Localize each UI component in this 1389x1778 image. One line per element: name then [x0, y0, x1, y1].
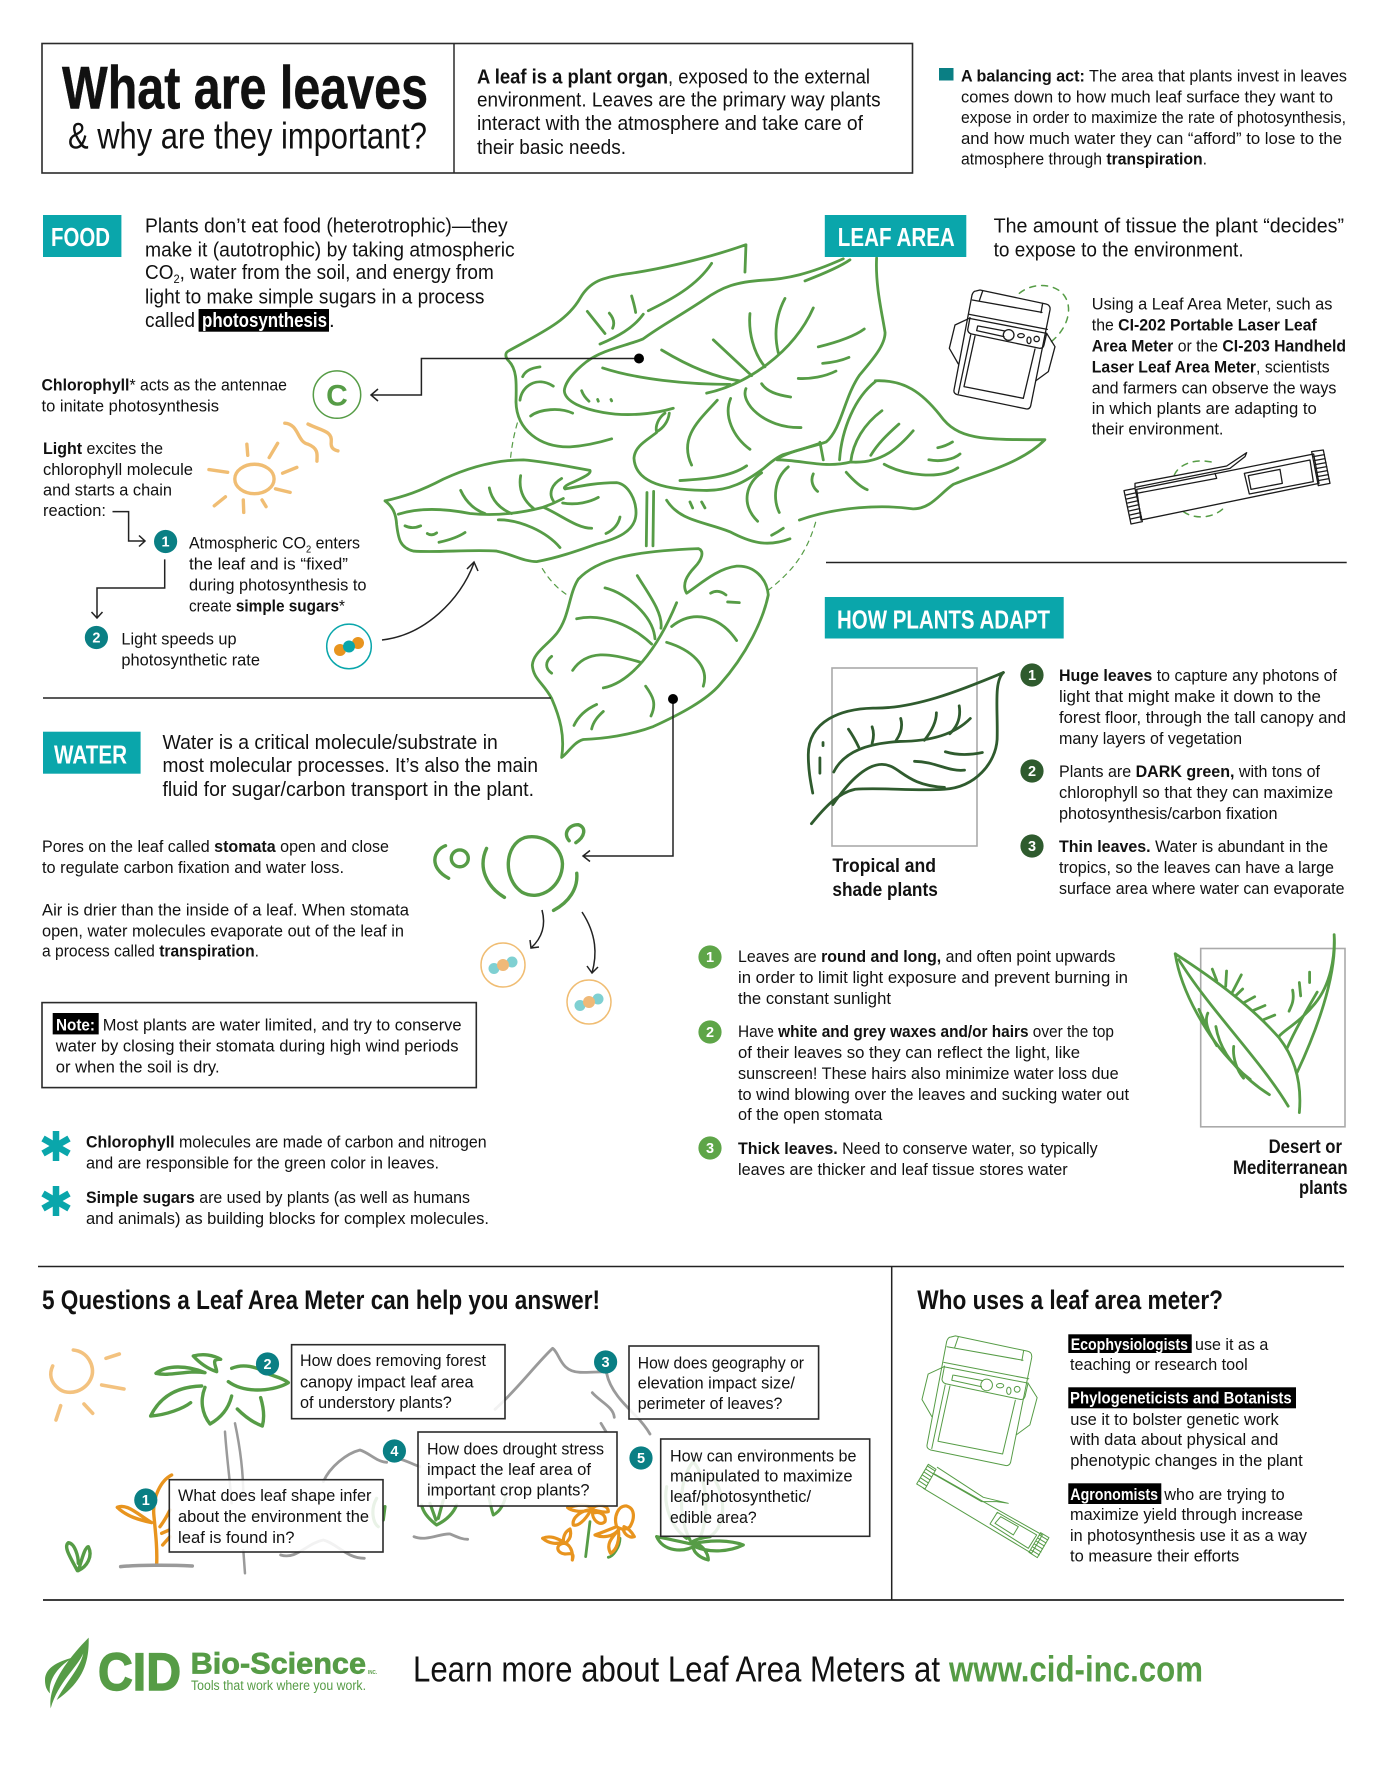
- leaf area meter text: and farmers can observe the ways: [1092, 378, 1336, 397]
- phylogeneticists text: with data about physical and: [1069, 1430, 1278, 1449]
- question 3: 3: [602, 1355, 610, 1371]
- note box: Most plants are water limited, and try to conserve: [103, 1016, 462, 1034]
- question 1: [134, 1480, 383, 1552]
- desert point 2: sunscreen! These hairs also minimize water loss due: [738, 1064, 1119, 1083]
- water paragraph: fluid for sugar/carbon transport in the plant.: [162, 778, 534, 801]
- question 2: of understory plants?: [300, 1393, 452, 1412]
- tropical leaf illustration: [808, 668, 1003, 846]
- transpiration text: open, water molecules evaporate out of the leaf in: [42, 921, 404, 940]
- scene: small sprout: [67, 1543, 90, 1571]
- question 2: How does removing forest: [300, 1351, 486, 1370]
- tropical point 1: light that might make it down to the: [1059, 687, 1321, 706]
- chlorophyll footnote: Chlorophyll molecules are made of carbon and nitrogen: [86, 1133, 487, 1152]
- question 4: How does drought stress: [427, 1439, 604, 1458]
- agronomists text: [1068, 1483, 1307, 1566]
- balancing act note: comes down to how much leaf surface they want to: [961, 88, 1333, 107]
- light text: and starts a chain: [43, 480, 172, 500]
- desert label: [1233, 1137, 1348, 1199]
- landscape scene: [51, 1348, 743, 1573]
- stomata text: Pores on the leaf called stomata open and close: [42, 837, 389, 856]
- scene: orange seedling: [117, 1475, 172, 1565]
- heading: 5 questions: 5 Questions a Leaf Area Meter can help you answer!: [42, 1285, 600, 1315]
- chlorophyll text: Chlorophyll* acts as the antennae: [42, 376, 287, 395]
- question 4: 4: [390, 1444, 398, 1460]
- question 1: What does leaf shape infer: [178, 1486, 372, 1505]
- question 5: manipulated to maximize: [670, 1466, 852, 1485]
- icon: logo leaf: [45, 1638, 89, 1708]
- scene: palm tree: [151, 1355, 288, 1573]
- question 1: 1: [142, 1493, 150, 1509]
- note box: water by closing their stomata during high wind periods: [55, 1037, 459, 1056]
- desert point 2: [698, 1020, 1129, 1124]
- transpiration text: [42, 900, 410, 960]
- icon: green handheld meter: [917, 1464, 1049, 1558]
- leaf area meter text: in which plants are adapting to: [1092, 399, 1317, 418]
- transpiration text: Air is drier than the inside of a leaf. When stomata: [42, 900, 410, 919]
- step 1 number: 1: [162, 535, 170, 551]
- agronomists text: Agronomists: [1070, 1485, 1158, 1504]
- step 1 number: [154, 530, 177, 553]
- icon: water molecule 2: [567, 980, 611, 1024]
- question 5: 5: [637, 1451, 645, 1467]
- tropical point 2: 2: [1028, 764, 1036, 780]
- scene: crop plant: [488, 1493, 506, 1515]
- phylogeneticists text: phenotypic changes in the plant: [1070, 1451, 1303, 1470]
- question 3: elevation impact size/: [638, 1373, 795, 1392]
- logo: CID Bio-Science: CID: [98, 1643, 181, 1702]
- food paragraph: light to make simple sugars in a process: [145, 286, 484, 309]
- arrow: reaction to step 1: [112, 512, 145, 546]
- transpiration text: a process called transpiration.: [42, 941, 259, 960]
- logo: CID Bio-Science: INC.: [368, 1670, 378, 1676]
- tropical label: [832, 855, 938, 901]
- call to action: Learn more about Leaf Area Meters at: [413, 1649, 940, 1690]
- icon: teal square: [939, 68, 954, 80]
- arrow: leaf to chlorophyll: [371, 354, 644, 401]
- icon: sugar molecule: [327, 624, 371, 669]
- phylogeneticists text: use it to bolster genetic work: [1070, 1410, 1279, 1429]
- scene: ground: [121, 1565, 192, 1567]
- ecophysiologists text: Ecophysiologists: [1071, 1335, 1188, 1354]
- chlorophyll footnote: [86, 1133, 487, 1173]
- ecophysiologists text: teaching or research tool: [1070, 1355, 1248, 1374]
- intro text: A leaf is a plant organ, exposed to the external: [477, 66, 870, 88]
- food paragraph: .: [329, 309, 335, 332]
- LEAF AREA section: [825, 215, 1346, 524]
- tropical point 2: chlorophyll so that they can maximize: [1059, 783, 1333, 802]
- icon: portable leaf area meter: [949, 286, 1069, 409]
- scene: sun: [51, 1350, 124, 1420]
- tropical point 3: tropics, so the leaves can have a large: [1059, 858, 1334, 877]
- tropical point 3: Thin leaves. Water is abundant in the: [1059, 837, 1328, 856]
- HOW PLANTS ADAPT badge: HOW PLANTS ADAPT: [837, 605, 1050, 635]
- desert point 3: Thick leaves. Need to conserve water, so typically: [738, 1139, 1098, 1158]
- question 3: perimeter of leaves?: [638, 1394, 782, 1413]
- leaf stems: [646, 491, 654, 546]
- question 1: leaf is found in?: [178, 1528, 294, 1547]
- question 2: canopy impact leaf area: [300, 1372, 474, 1391]
- step 2 text: Light speeds up: [121, 630, 237, 649]
- light text: reaction:: [43, 501, 106, 520]
- desert point 3: leaves are thicker and leaf tissue stores water: [738, 1160, 1068, 1179]
- leaf area meter text: Area Meter or the CI-203 Handheld: [1092, 336, 1346, 355]
- balancing act note: and how much water they can “afford” to lose to the: [961, 129, 1342, 148]
- ecophysiologists text: use it as a: [1195, 1335, 1269, 1354]
- icon: chlorophyll circle: C: [326, 380, 348, 412]
- tropical label: Tropical and: [832, 855, 936, 877]
- leaf: top left leaf: [506, 245, 746, 447]
- agronomists text: in photosynthesis use it as a way: [1070, 1526, 1307, 1545]
- FOOD badge: FOOD: [51, 222, 110, 252]
- chlorophyll footnote: and are responsible for the green color in leaves.: [86, 1154, 439, 1173]
- tropical point 3: [1020, 834, 1344, 898]
- desert point 3: [698, 1136, 1098, 1179]
- leaf area meter text: their environment.: [1092, 419, 1224, 438]
- food paragraph: make it (autotrophic) by taking atmospheric: [145, 239, 515, 262]
- FOOD section: [42, 215, 644, 670]
- question 5: leaf/photosynthetic/: [670, 1487, 811, 1506]
- water paragraph: [162, 731, 538, 801]
- leaf area meter text: Using a Leaf Area Meter, such as: [1092, 294, 1332, 313]
- arrow: sugar to leaf: [382, 562, 478, 640]
- agronomists text: maximize yield through increase: [1070, 1505, 1303, 1524]
- title panel: [42, 44, 912, 173]
- tropical point 1: many layers of vegetation: [1059, 729, 1242, 748]
- light text: chlorophyll molecule: [43, 460, 193, 479]
- heading: who uses: Who uses a leaf area meter?: [917, 1285, 1223, 1315]
- logo: CID Bio-Science: Bio-Science: [191, 1647, 366, 1680]
- divider: [826, 562, 1347, 564]
- arrow: leaf to stomata: [583, 694, 678, 862]
- agronomists text: who are trying to: [1163, 1485, 1285, 1504]
- scene: small plants: [373, 1498, 457, 1527]
- leaf area intro: [994, 215, 1344, 262]
- bottom panel rules: [38, 1266, 1344, 1600]
- question 5: edible area?: [670, 1508, 757, 1527]
- icon: asterisk: [43, 1186, 69, 1216]
- desert point 2: of their leaves so they can reflect the light, like: [738, 1043, 1080, 1062]
- icon: water molecule 1: [481, 943, 525, 987]
- leaf area intro: The amount of tissue the plant “decides”: [994, 215, 1344, 238]
- agronomists text: to measure their efforts: [1070, 1547, 1239, 1566]
- who uses panel: [917, 1285, 1307, 1566]
- simple sugars footnote: and animals) as building blocks for complex molecules.: [86, 1209, 489, 1228]
- title: [62, 54, 428, 156]
- divider: [43, 697, 551, 699]
- intro text: environment. Leaves are the primary way plants: [477, 88, 881, 112]
- leaf: bottom leaf: [532, 549, 768, 757]
- light text: [43, 439, 193, 520]
- icon: chlorophyll circle: [313, 371, 361, 418]
- footer: [45, 1638, 1203, 1708]
- stomata text: [42, 837, 389, 877]
- ecophysiologists text: [1068, 1334, 1269, 1374]
- HOW PLANTS ADAPT section: [698, 597, 1348, 1199]
- icon: sun: [209, 423, 338, 512]
- phylogeneticists text: Phylogeneticists and Botanists: [1070, 1389, 1292, 1408]
- tropical point 1: Huge leaves to capture any photons of: [1059, 666, 1337, 685]
- balancing act note: [939, 67, 1347, 169]
- desert label: Mediterranean: [1233, 1158, 1348, 1179]
- step 1 text: create simple sugars*: [189, 597, 345, 616]
- central leaf illustration: [385, 245, 1045, 757]
- step 1 text: [189, 534, 366, 616]
- water paragraph: most molecular processes. It’s also the main: [162, 754, 538, 777]
- leaf: left leaf: [385, 460, 636, 562]
- scene: mountain: [414, 1348, 650, 1539]
- simple sugars footnote: [86, 1188, 489, 1228]
- stomata illustration: [435, 825, 584, 910]
- question 4: important crop plants?: [427, 1480, 590, 1499]
- dashed stem arcs: [510, 423, 816, 597]
- desert point 2: Have white and grey waxes and/or hairs over the top: [738, 1022, 1114, 1041]
- step 1 text: Atmospheric CO: [189, 534, 314, 553]
- desert point 2: 2: [706, 1025, 714, 1041]
- desert label: plants: [1299, 1178, 1348, 1199]
- intro text: [477, 66, 881, 159]
- balancing act note: A balancing act: The area that plants invest in leaves: [961, 67, 1347, 86]
- question 4: impact the leaf area of: [427, 1460, 591, 1479]
- leaf area intro: to expose to the environment.: [994, 239, 1244, 262]
- WATER section: [42, 694, 678, 1228]
- leaf: centre leaf: [564, 259, 864, 490]
- question 2: [256, 1345, 505, 1419]
- scene: hills: [281, 1450, 420, 1558]
- tropical label: shade plants: [832, 879, 938, 901]
- simple sugars footnote: Simple sugars are used by plants (as well as humans: [86, 1188, 470, 1207]
- chlorophyll text: [42, 376, 287, 416]
- food paragraph: called: [145, 309, 195, 332]
- food paragraph: photosynthesis: [202, 309, 327, 332]
- FOOD badge: [43, 215, 121, 257]
- logo: CID Bio-Science: Tools that work where you work.: [191, 1678, 366, 1693]
- intro text: their basic needs.: [477, 136, 626, 159]
- desert point 1: the constant sunlight: [738, 989, 891, 1008]
- food paragraph: [145, 215, 515, 332]
- leaf area meter text: the CI-202 Portable Laser Leaf: [1092, 315, 1317, 334]
- step 1 text: 2: [306, 545, 312, 556]
- tropical point 1: [1020, 663, 1346, 748]
- question 5: How can environments be: [670, 1446, 856, 1465]
- tropical point 2: photosynthesis/carbon fixation: [1059, 804, 1278, 823]
- leaf: centre leaf right edge: [779, 258, 885, 458]
- water paragraph: Water is a critical molecule/substrate in: [162, 731, 498, 754]
- desert point 3: 3: [706, 1141, 714, 1157]
- step 2 text: [121, 630, 260, 670]
- balancing act note: atmosphere through transpiration.: [961, 150, 1207, 169]
- icon: handheld leaf area meter: [1124, 450, 1330, 524]
- desert point 1: 1: [706, 950, 714, 966]
- icon: green portable meter: [922, 1336, 1037, 1466]
- balancing act note: expose in order to maximize the rate of photosynthesis,: [961, 108, 1346, 127]
- leaf area meter text: [1092, 294, 1346, 438]
- tropical point 1: 1: [1028, 668, 1036, 684]
- title: What are leaves: [62, 54, 428, 122]
- light text: Light excites the: [43, 439, 163, 458]
- food paragraph: CO: [145, 261, 176, 284]
- WATER badge: [43, 732, 141, 774]
- desert leaf illustration: [1175, 935, 1345, 1127]
- HOW PLANTS ADAPT badge: [825, 597, 1064, 638]
- food paragraph: 2: [173, 272, 180, 286]
- call to action: www.cid-inc.com: [948, 1649, 1203, 1690]
- question 2: 2: [263, 1357, 272, 1373]
- desert point 2: of the open stomata: [738, 1105, 883, 1124]
- title: & why are they important?: [68, 116, 427, 156]
- logo: CID Bio-Science: [45, 1638, 378, 1708]
- tropical point 3: 3: [1028, 839, 1036, 855]
- desert point 1: [698, 945, 1128, 1008]
- leaf: right leaf lower lobe: [667, 467, 818, 543]
- tropical point 1: forest floor, through the tall canopy and: [1059, 708, 1346, 727]
- tropical point 2: Plants are DARK green, with tons of: [1059, 762, 1320, 781]
- desert point 1: in order to limit light exposure and prevent burning in: [738, 968, 1128, 987]
- step 2 text: photosynthetic rate: [121, 651, 260, 670]
- desert point 2: to wind blowing over the leaves and sucking water out: [738, 1085, 1129, 1104]
- chlorophyll text: to initate photosynthesis: [42, 397, 219, 416]
- step 1 text: the leaf and is “fixed”: [189, 555, 348, 574]
- LEAF AREA badge: LEAF AREA: [838, 222, 955, 252]
- intro text: interact with the atmosphere and take care of: [477, 112, 863, 135]
- arrows: stomata to water molecules: [530, 910, 598, 973]
- question 1: about the environment the: [178, 1507, 369, 1526]
- note box: or when the soil is dry.: [56, 1058, 220, 1077]
- WATER badge: WATER: [54, 739, 127, 769]
- stomata text: to regulate carbon fixation and water loss.: [42, 858, 344, 877]
- step 2 number: 2: [92, 631, 100, 647]
- step 1 text: enters: [311, 534, 360, 553]
- question 3: How does geography or: [638, 1353, 804, 1372]
- note box: Note:: [56, 1016, 95, 1034]
- desert point 1: Leaves are round and long, and often point upwards: [738, 947, 1115, 966]
- tropical point 2: [1020, 759, 1333, 823]
- food paragraph: Plants don’t eat food (heterotrophic)—they: [145, 215, 508, 238]
- question 5: [629, 1439, 870, 1536]
- icon: asterisk: [43, 1131, 69, 1161]
- leaf: right leaf: [777, 381, 1045, 520]
- tropical point 3: surface area where water can evaporate: [1059, 879, 1344, 898]
- phylogeneticists text: [1068, 1387, 1303, 1470]
- question 3: [594, 1346, 819, 1419]
- leaf area meter text: Laser Leaf Area Meter, scientists: [1092, 357, 1330, 376]
- note box: [42, 1003, 476, 1088]
- step 2 number: [85, 626, 108, 649]
- scene: rosette plant: [657, 1462, 743, 1560]
- 5 questions panel: [42, 1285, 870, 1573]
- food paragraph: , water from the soil, and energy from: [180, 261, 494, 284]
- scene: orange flowers: [543, 1505, 634, 1560]
- step 1 text: during photosynthesis to: [189, 576, 366, 595]
- desert label: Desert or: [1269, 1137, 1343, 1158]
- arrow: step 1 to step 2: [92, 559, 165, 618]
- question 4: [383, 1432, 617, 1506]
- LEAF AREA badge: [825, 215, 966, 257]
